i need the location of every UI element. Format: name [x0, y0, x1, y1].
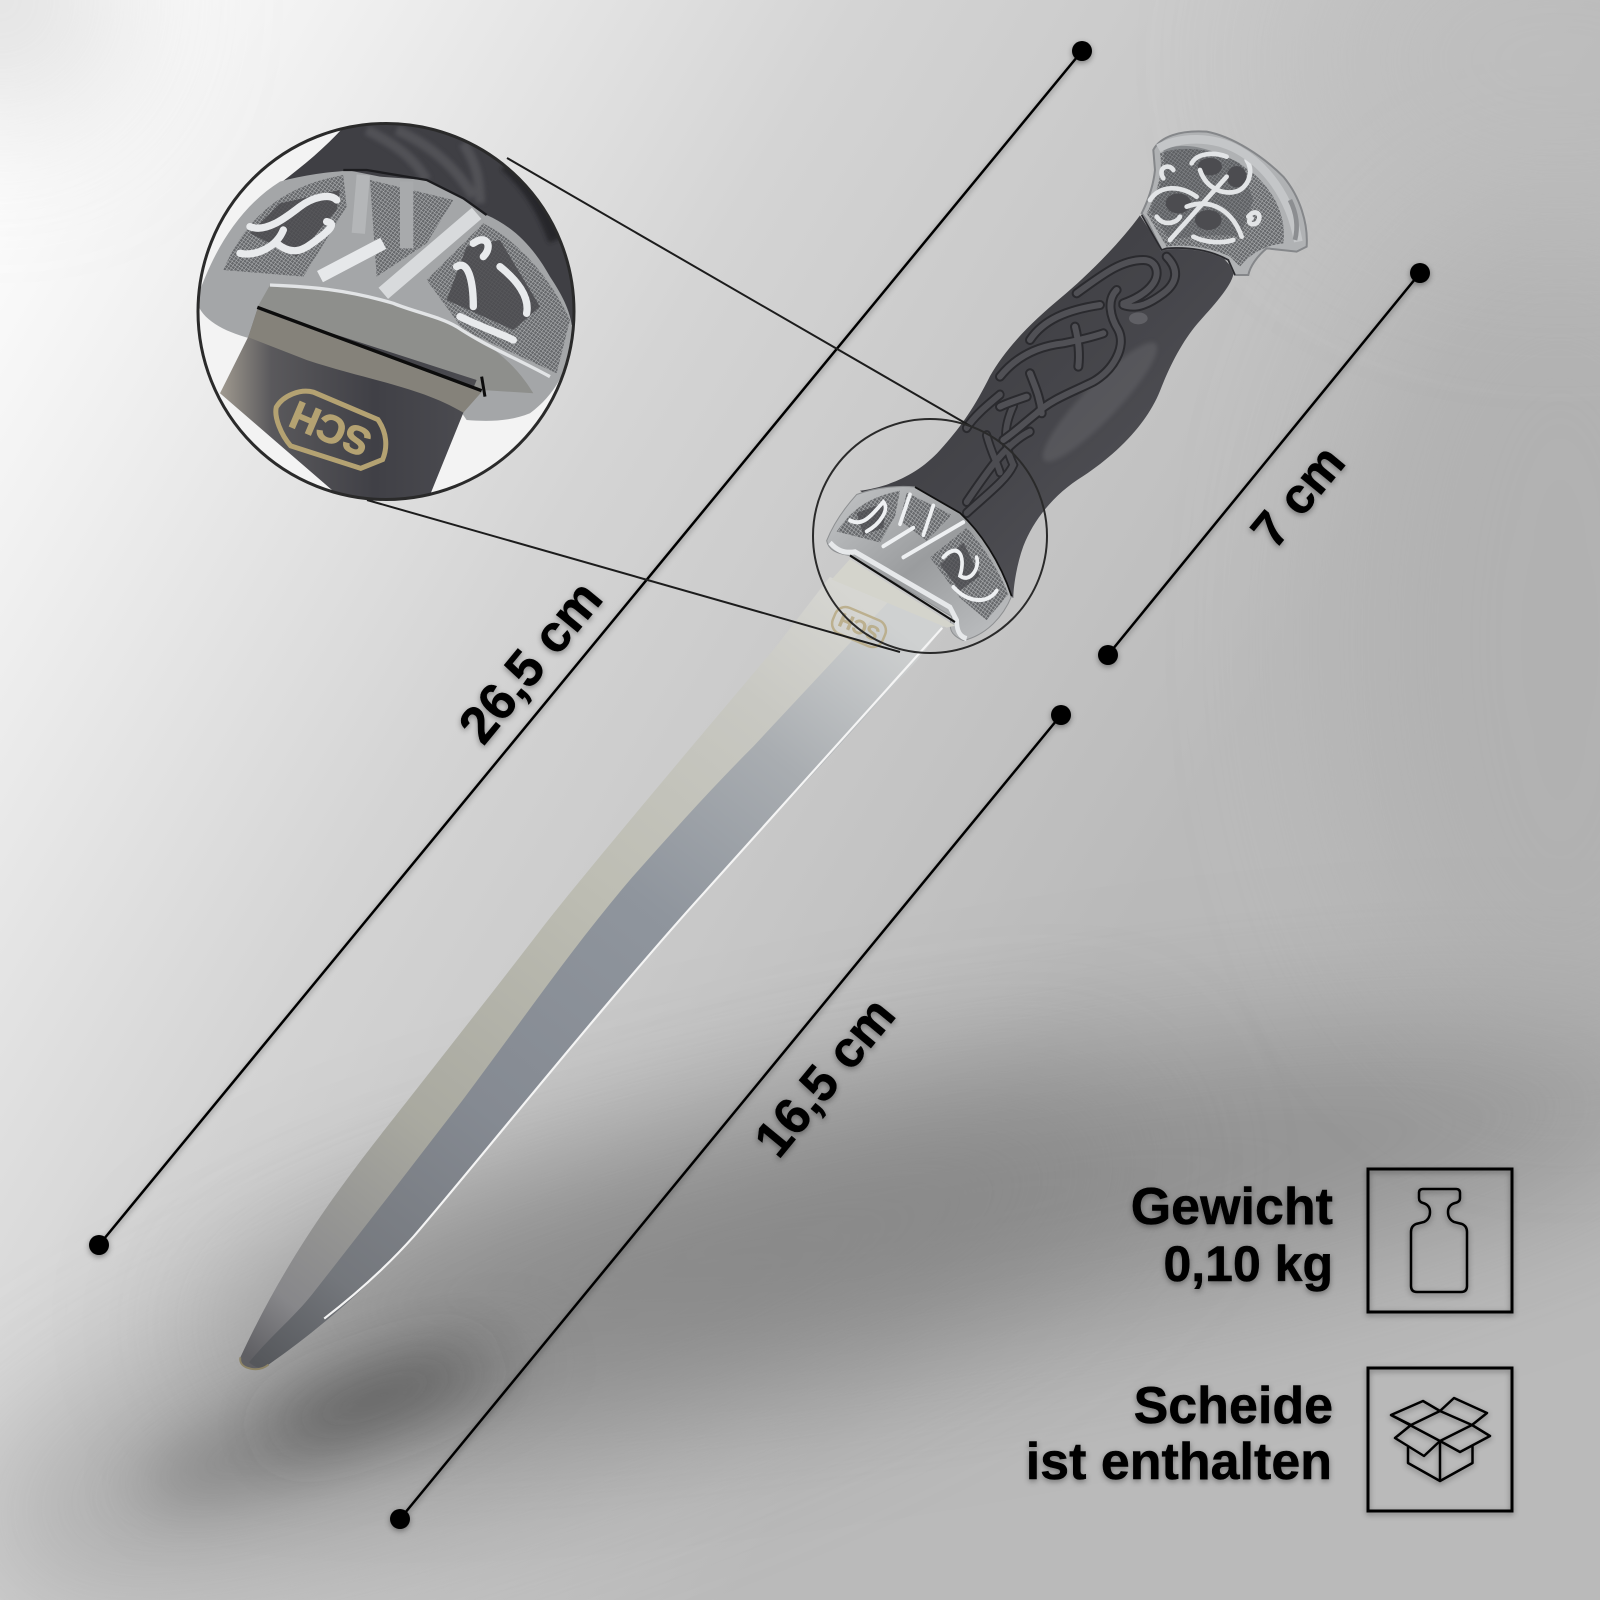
icon: open box [1391, 1398, 1490, 1481]
dimension line: total length 26,5 cm: 26,5 cm [448, 570, 614, 754]
scabbard info text: Scheide [1134, 1377, 1333, 1435]
scabbard info text [1026, 1377, 1333, 1491]
pommel [1142, 131, 1307, 275]
weight info text [1131, 1178, 1333, 1292]
magnifier connector lines [367, 158, 972, 652]
dimension line: total length 26,5 cm [89, 41, 1092, 1255]
handle [860, 215, 1234, 598]
dagger [240, 131, 1307, 1369]
magnified guard [197, 171, 573, 421]
dimension line: blade length 16,5 cm [390, 705, 1071, 1529]
dimension line: handle length 7 cm: 7 cm [1240, 434, 1356, 558]
small detail circle around the guard [813, 419, 1047, 653]
magnified detail circle [197, 120, 574, 520]
scabbard info text: ist enthalten [1026, 1433, 1332, 1491]
small SCH stamp on blade: SCH [836, 608, 883, 644]
magnified SCH stamp: SCH [284, 392, 377, 465]
dimension line: handle length 7 cm [1098, 263, 1430, 665]
magnified blade tang [220, 309, 476, 498]
icon: weight [1411, 1189, 1467, 1292]
guard [827, 486, 1012, 641]
small SCH stamp on blade [829, 604, 889, 650]
hilt [827, 215, 1234, 641]
weight icon box [1368, 1169, 1512, 1312]
handle braid [1000, 257, 1175, 440]
weight info text: Gewicht [1131, 1178, 1333, 1236]
magnified handle [280, 120, 574, 327]
blade [240, 577, 947, 1369]
scabbard icon box [1368, 1368, 1512, 1511]
magnified front face [257, 285, 533, 393]
weight info text: 0,10 kg [1163, 1236, 1333, 1292]
dimension line: blade length 16,5 cm: 16,5 cm [743, 987, 906, 1167]
